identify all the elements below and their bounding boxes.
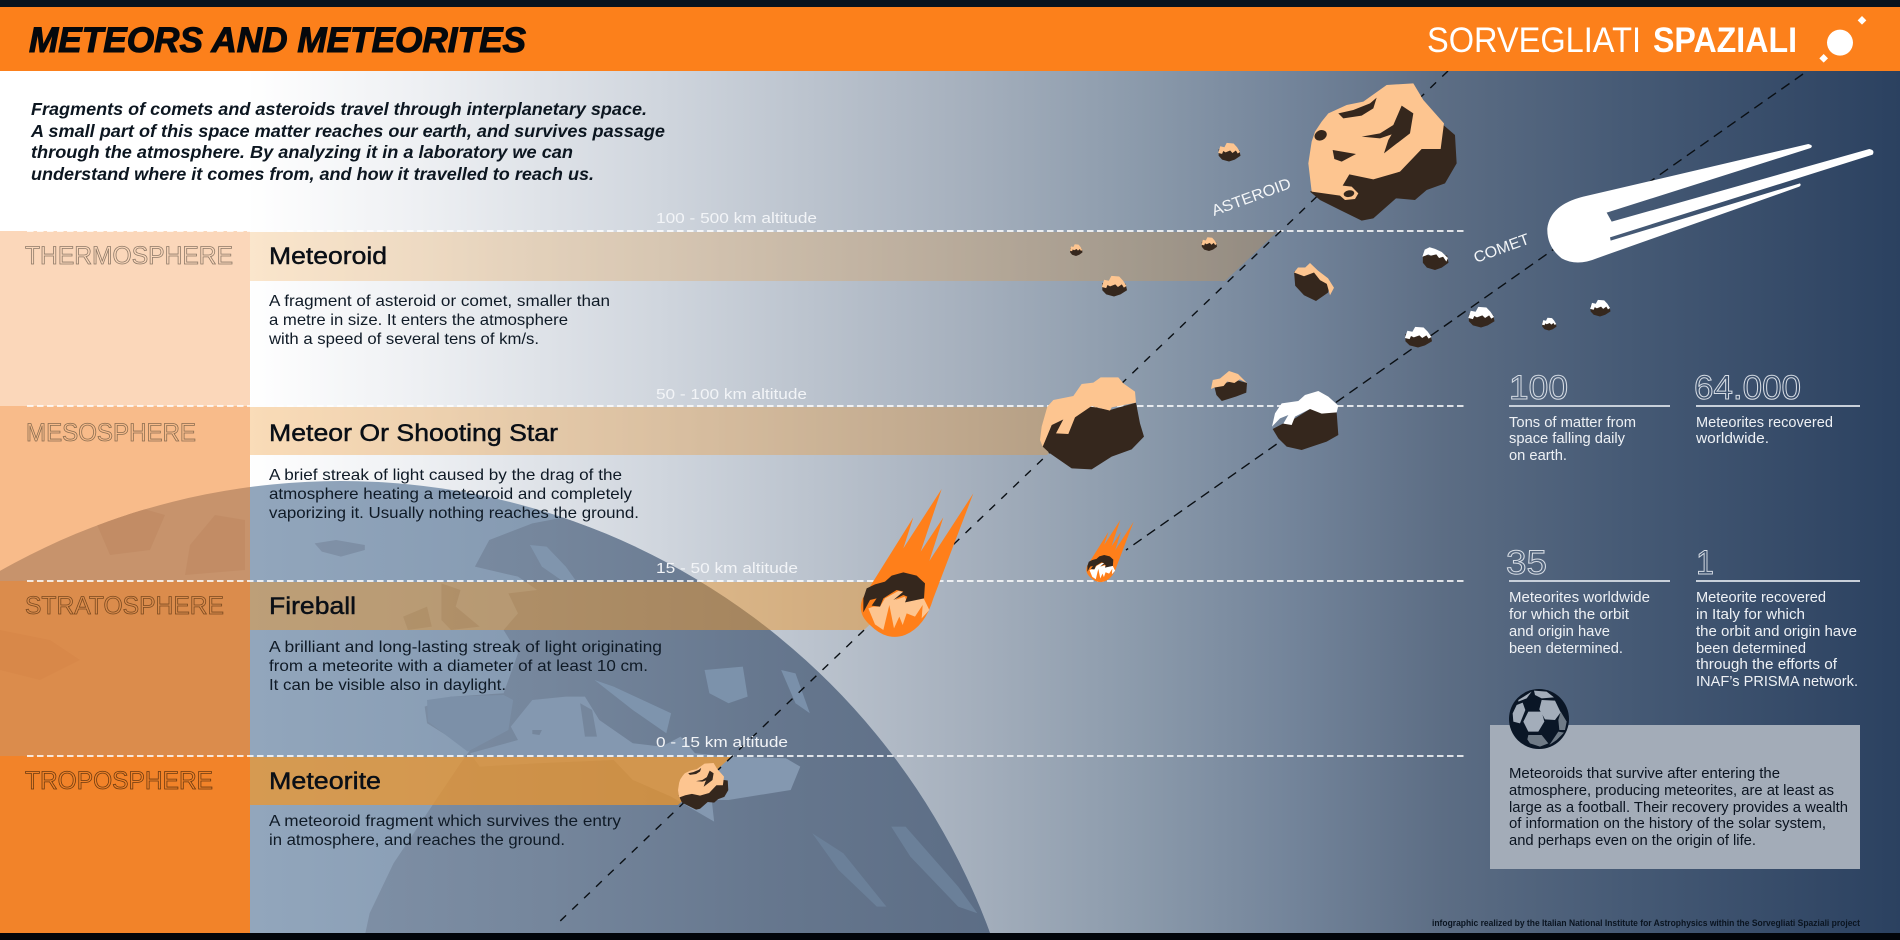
label troposphere: TROPOSPHERE: [25, 767, 213, 795]
label mesosphere: MESOSPHERE: [26, 419, 196, 447]
comet label: COMET: [1472, 231, 1532, 267]
stat: 64.000 meteorites: worldwide.: [1695, 430, 1769, 447]
heading meteoroid: Meteoroid: [269, 243, 387, 270]
stat: 1 meteorite in Italy: [1696, 544, 1860, 690]
header bar: [0, 7, 1900, 71]
stat: 1 meteorite in Italy: INAF’s PRISMA network.: [1696, 673, 1858, 690]
football panel text: atmosphere, producing meteorites, are at least as: [1509, 782, 1834, 799]
icon: football: [1509, 689, 1569, 749]
football panel text: and perhaps even on the origin of life.: [1509, 832, 1756, 849]
description meteorite: A meteoroid fragment which survives the entry: [269, 813, 621, 830]
stat: 64.000 meteorites: Meteorites recovered: [1696, 414, 1833, 431]
credit line: infographic realized by the Italian National Institute for Astrophysics within the Sorvegliati Spaziali project: [1432, 918, 1861, 929]
atmosphere column: stratosphere band: [0, 581, 250, 756]
altitude label 15-50: 15 - 50 km altitude: [656, 560, 798, 577]
description fireball: [269, 639, 662, 694]
stat: 35 meteorites: Meteorites worldwide: [1509, 589, 1650, 606]
comet trajectory: [1126, 74, 1803, 550]
bar: meteor: [250, 407, 1098, 455]
stat: 35 meteorites: 35: [1506, 544, 1547, 582]
intro text: A small part of this space matter reaches our earth, and survives passage: [30, 121, 665, 141]
description meteor: [269, 467, 639, 522]
altitude label 100-500: 100 - 500 km altitude: [656, 210, 817, 227]
stat: 1 meteorite in Italy: 1: [1696, 544, 1714, 582]
stat: 64.000 meteorites: 64.000: [1694, 369, 1801, 407]
football panel text: of information on the history of the solar system,: [1509, 815, 1826, 832]
stat: 35 meteorites: [1506, 544, 1670, 657]
description meteorite: [269, 813, 621, 849]
meteorite rock: [678, 763, 728, 810]
asteroid: [1308, 83, 1457, 221]
stat: 1 meteorite in Italy: in Italy for which: [1696, 606, 1805, 623]
intro text: understand where it comes from, and how it travelled to reach us.: [31, 164, 594, 184]
description fireball: A brilliant and long-lasting streak of light originating: [269, 639, 662, 656]
logo text: SPAZIALI: [1653, 21, 1797, 60]
logo text: [1427, 21, 1797, 60]
large fireball: [861, 489, 973, 637]
description meteor: vaporizing it. Usually nothing reaches the ground.: [269, 505, 639, 522]
label thermosphere: THERMOSPHERE: [25, 242, 233, 270]
description meteor: A brief streak of light caused by the drag of the: [269, 467, 622, 484]
altitude label 0-15: 0 - 15 km altitude: [656, 734, 788, 751]
stat: 100 tons: Tons of matter from: [1509, 414, 1636, 431]
intro text: Fragments of comets and asteroids travel through interplanetary space.: [31, 99, 647, 119]
bar: fireball: [250, 582, 915, 630]
description meteorite: in atmosphere, and reaches the ground.: [269, 832, 565, 849]
stat: 35 meteorites: been determined.: [1509, 640, 1623, 657]
stat: 1 meteorite in Italy: been determined: [1696, 640, 1806, 657]
asteroid trajectory: [555, 71, 1448, 926]
description meteoroid: a metre in size. It enters the atmosphere: [269, 312, 568, 329]
small asteroid fragments: [1070, 143, 1334, 401]
stat: 1 meteorite in Italy: Meteorite recovered: [1696, 589, 1826, 606]
heading meteorite: Meteorite: [269, 768, 381, 795]
stat: 35 meteorites: and origin have: [1509, 623, 1610, 640]
description meteor: atmosphere heating a meteoroid and completely: [269, 486, 632, 503]
stat: 64.000 meteorites: [1694, 369, 1860, 447]
atmosphere column: troposphere band: [0, 756, 250, 933]
small comet fireball: [1086, 520, 1134, 582]
altitude dashed lines: [27, 231, 1467, 756]
intro text: [30, 99, 665, 184]
description fireball: from a meteorite with a diameter of at least 10 cm.: [269, 658, 648, 675]
football panel text: Meteoroids that survive after entering the: [1509, 765, 1780, 782]
atmosphere column: mesosphere band: [0, 406, 250, 581]
logo icon: [1819, 16, 1866, 63]
bar: meteoroid: [250, 232, 1277, 281]
atmosphere column: thermosphere band: [0, 231, 250, 406]
top black strip: [0, 0, 1900, 7]
heading fireball: Fireball: [269, 593, 356, 620]
description meteoroid: A fragment of asteroid or comet, smaller than: [269, 293, 610, 310]
stat: 100 tons: space falling daily: [1509, 430, 1625, 447]
stat: 1 meteorite in Italy: the orbit and origin have: [1696, 623, 1857, 640]
football panel text: [1509, 765, 1848, 849]
description fireball: It can be visible also in daylight.: [269, 677, 506, 694]
label stratosphere: STRATOSPHERE: [25, 592, 224, 620]
stat: 100 tons: [1509, 369, 1670, 464]
comet: [1547, 144, 1873, 262]
earth globe: [0, 481, 990, 933]
comet fragment rock at mesosphere: [1272, 391, 1338, 450]
football panel: [1490, 725, 1860, 869]
logo text: SORVEGLIATI: [1427, 21, 1641, 60]
intro text: through the atmosphere. By analyzing it in a laboratory we can: [31, 142, 573, 162]
stat: 100 tons: 100: [1509, 369, 1568, 407]
stat: 1 meteorite in Italy: through the efforts of: [1696, 656, 1838, 673]
bar: meteorite: [250, 757, 731, 805]
small comet fragments: [1405, 247, 1610, 348]
heading meteor: Meteor Or Shooting Star: [269, 420, 558, 447]
stat: 35 meteorites: for which the orbit: [1509, 606, 1630, 623]
football panel text: large as a football. Their recovery provides a wealth: [1509, 799, 1848, 816]
altitude label 50-100: 50 - 100 km altitude: [656, 386, 807, 403]
asteroid label: ASTEROID: [1210, 175, 1293, 220]
description meteoroid: [268, 293, 610, 348]
title: METEORS AND METEORITES: [29, 21, 526, 60]
description meteoroid: with a speed of several tens of km/s.: [268, 331, 539, 348]
stat: 100 tons: on earth.: [1509, 447, 1567, 464]
bottom black strip: [0, 933, 1900, 940]
meteoroid rock at mesosphere: [1040, 377, 1144, 469]
